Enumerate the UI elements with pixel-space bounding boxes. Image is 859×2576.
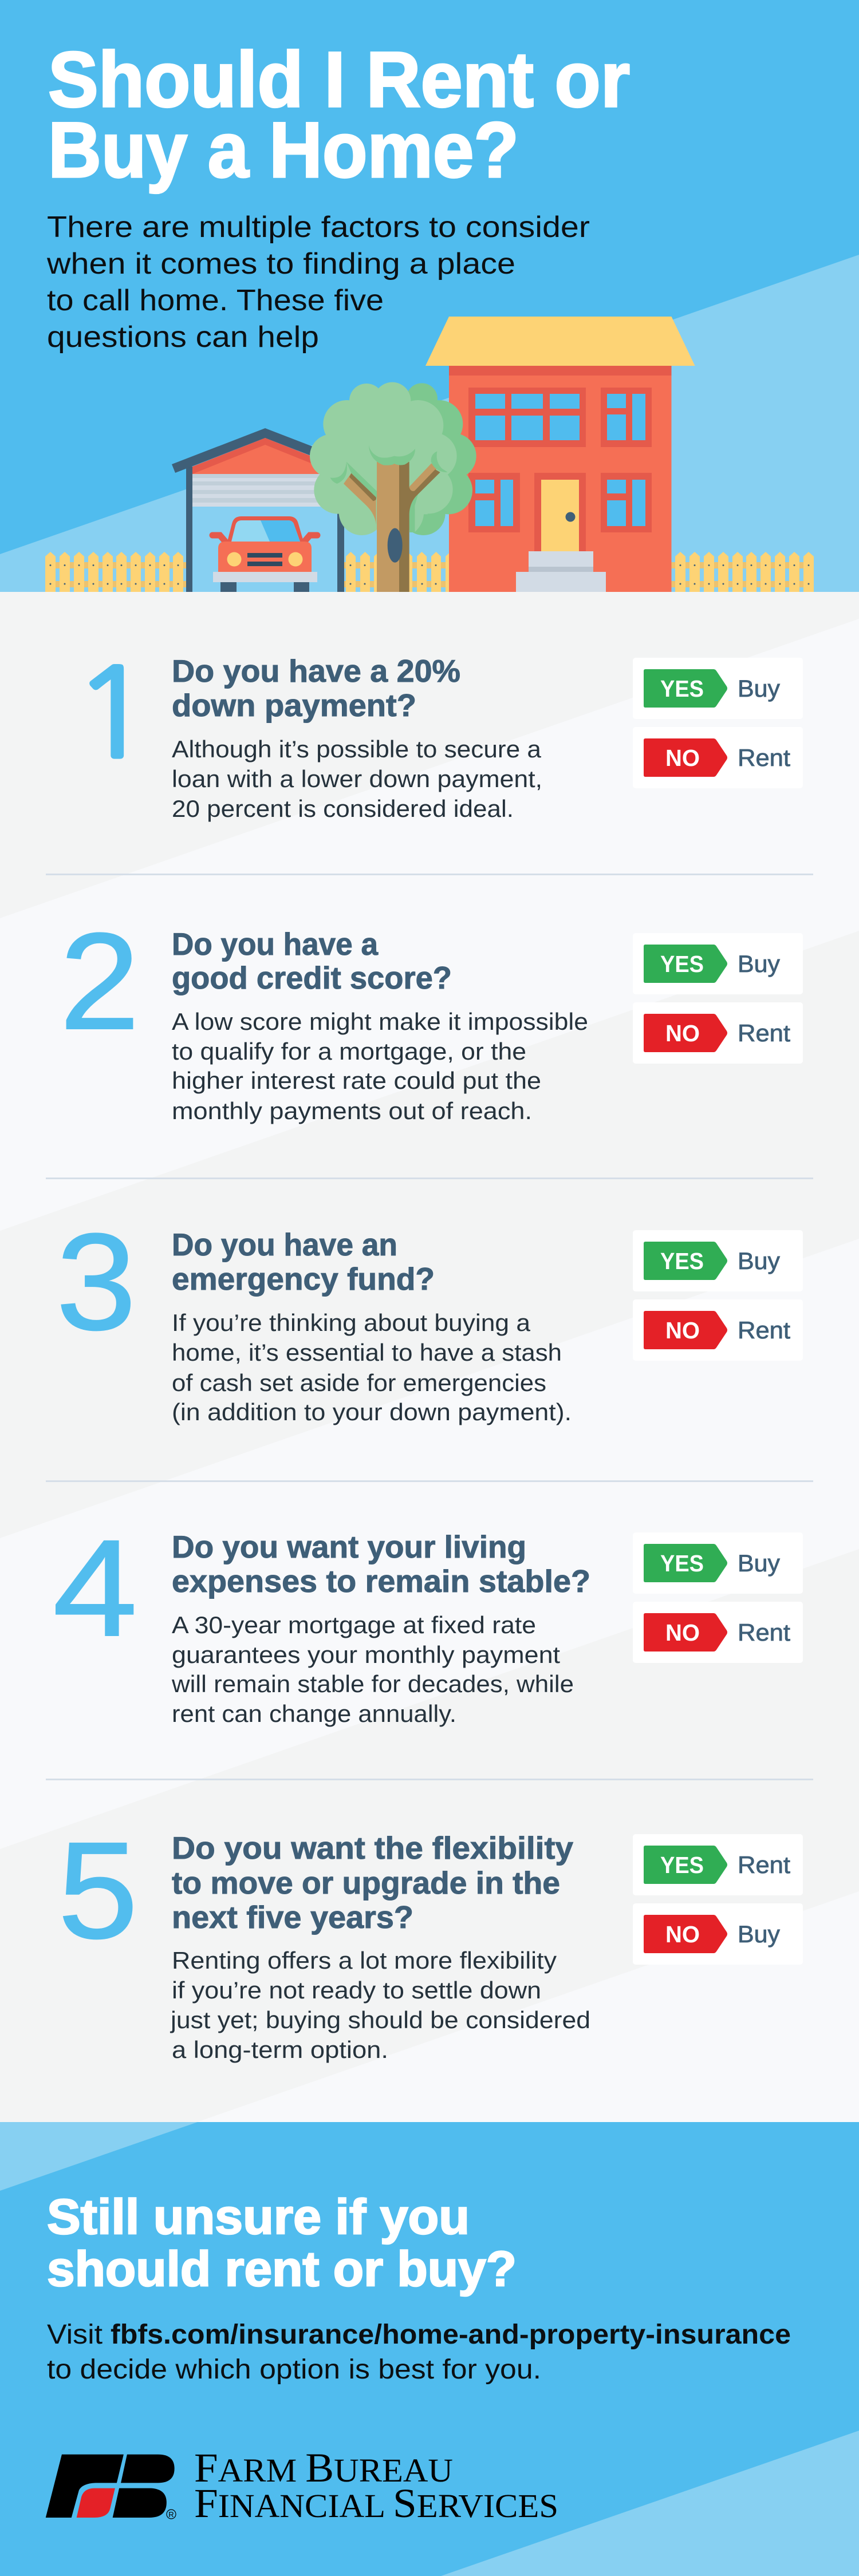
intro text: when it comes to finding a place [46, 247, 515, 280]
logo wordmark: FINANCIAL SERVICES [194, 2480, 558, 2526]
question 1 [72, 652, 803, 822]
body 1: loan with a lower down payment, [172, 765, 542, 792]
footer heading [47, 2190, 517, 2297]
number 2: 2 [60, 904, 140, 1058]
footer background [0, 2122, 859, 2576]
footer text: fbfs.com/insurance/home-and-property-insurance [111, 2320, 791, 2350]
body 2: higher interest rate could put the [172, 1067, 541, 1094]
answers 2 [633, 933, 803, 1064]
heading 2 [172, 926, 452, 995]
body 5 [170, 1947, 590, 2063]
body 4: guarantees your monthly payment [172, 1641, 560, 1668]
body 3 [172, 1309, 572, 1425]
logo [46, 2445, 558, 2526]
answers 1: NO [665, 745, 700, 771]
body 5: if you’re not ready to settle down [172, 1977, 541, 2004]
body 5: just yet; buying should be considered [170, 2006, 590, 2033]
heading 1: Do you have a 20% [172, 653, 460, 689]
answers 2: NO [665, 1020, 700, 1046]
heading 5 [172, 1830, 573, 1935]
garage [172, 428, 358, 592]
answers 4: Rent [738, 1619, 790, 1646]
body 4: rent can change annually. [172, 1700, 456, 1727]
body 2: monthly payments out of reach. [172, 1097, 532, 1124]
number 3: 3 [56, 1205, 136, 1358]
heading 3: emergency fund? [172, 1261, 435, 1297]
title: Should I Rent or [48, 36, 630, 124]
body 4: A 30-year mortgage at fixed rate [172, 1611, 536, 1638]
footer text: to decide which option is best for you. [47, 2354, 541, 2385]
answers 5 [633, 1834, 803, 1965]
logo wordmark [194, 2445, 558, 2526]
intro text: to call home. These five [47, 284, 384, 317]
answers 3: Rent [738, 1317, 790, 1344]
heading 3 [172, 1227, 435, 1297]
intro text: There are multiple factors to consider [47, 211, 590, 244]
number 1: 1 [72, 652, 154, 775]
heading 2: Do you have a [172, 926, 378, 962]
body 2: to qualify for a mortgage, or the [172, 1038, 526, 1065]
intro text: questions can help [47, 321, 319, 354]
fence: left [45, 552, 186, 592]
answers 3: YES [660, 1248, 704, 1274]
answers 5: NO [665, 1921, 700, 1947]
answers 5: YES [660, 1852, 704, 1878]
body 2 [172, 1008, 588, 1124]
heading 5: next five years? [172, 1899, 413, 1935]
questions section background [0, 592, 859, 2191]
body 1 [172, 736, 542, 822]
footer text [47, 2320, 791, 2385]
answers 2: YES [660, 951, 704, 977]
answers 4: YES [660, 1550, 704, 1577]
car [212, 516, 317, 592]
logo mark [46, 2455, 175, 2518]
footer text: Visit [47, 2320, 103, 2350]
answers 4: NO [665, 1619, 700, 1646]
logo wordmark: FARM BUREAU [194, 2445, 453, 2491]
answers 3 [633, 1230, 803, 1361]
heading 4: Do you want your living [172, 1529, 526, 1564]
body 2: A low score might make it impossible [172, 1008, 588, 1035]
body 3: home, it’s essential to have a stash [172, 1339, 562, 1366]
answers 4 [633, 1532, 803, 1663]
heading 5: Do you want the flexibility [172, 1830, 573, 1866]
answers 2: Rent [738, 1020, 790, 1046]
fence: middle [344, 552, 455, 592]
body 3: of cash set aside for emergencies [172, 1369, 546, 1396]
dividers [46, 874, 813, 1780]
body 1: 20 percent is considered ideal. [172, 795, 514, 822]
intro text [46, 211, 590, 354]
answers 1: Rent [738, 744, 790, 771]
heading 1: down payment? [172, 688, 416, 723]
heading 4 [172, 1529, 590, 1599]
answers 3: Buy [738, 1247, 780, 1274]
body 4: will remain stable for decades, while [171, 1670, 574, 1697]
title [48, 36, 630, 194]
body 4 [171, 1611, 574, 1727]
footer heading: should rent or buy? [47, 2242, 517, 2297]
question 2 [60, 904, 803, 1124]
registered mark: R [168, 2510, 174, 2519]
answers 2: Buy [738, 950, 780, 977]
answers 3: NO [665, 1317, 700, 1344]
heading 2: good credit score? [172, 960, 452, 995]
body 3: If you’re thinking about buying a [172, 1309, 531, 1336]
heading 5: to move or upgrade in the [172, 1865, 560, 1901]
body 5: a long-term option. [172, 2036, 388, 2063]
answers 1: YES [660, 675, 704, 702]
answers 4: Buy [738, 1550, 780, 1577]
answers 1: Buy [738, 675, 780, 702]
body 1: Although it’s possible to secure a [172, 736, 542, 762]
question 5 [58, 1814, 803, 2063]
answers 1 [633, 658, 803, 788]
house [425, 317, 695, 592]
body 5: Renting offers a lot more flexibility [172, 1947, 557, 1974]
question 3 [56, 1205, 803, 1425]
tree [310, 382, 476, 592]
question 4 [53, 1511, 803, 1727]
footer heading: Still unsure if you [47, 2190, 470, 2245]
heading 3: Do you have an [172, 1227, 397, 1262]
number 4: 4 [53, 1511, 137, 1665]
fence: right [671, 552, 814, 592]
answers 5: Buy [738, 1921, 780, 1947]
heading 1 [172, 653, 460, 723]
registered mark [167, 2510, 176, 2519]
number 5: 5 [58, 1814, 138, 1967]
heading 4: expenses to remain stable? [172, 1563, 590, 1599]
title: Buy a Home? [48, 106, 519, 194]
answers 5: Rent [738, 1851, 790, 1878]
hero background [0, 0, 859, 592]
body 3: (in addition to your down payment). [172, 1398, 572, 1425]
